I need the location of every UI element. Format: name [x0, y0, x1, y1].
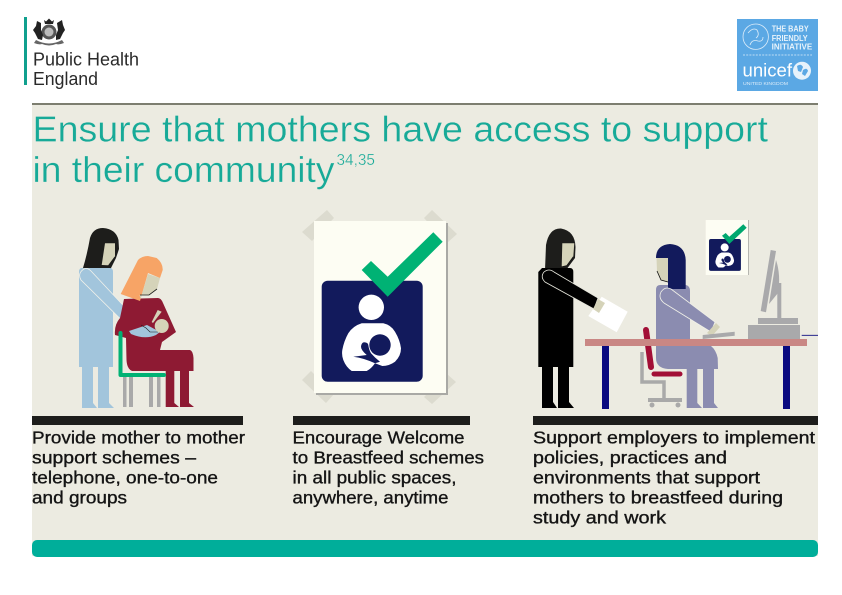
text: united kingdom: UNITED KINGDOM	[743, 81, 788, 87]
text: organisation name: Public Health	[33, 48, 139, 70]
text: support employers: environments that support	[533, 467, 760, 487]
panel background	[32, 104, 818, 556]
standing visitor	[538, 228, 628, 408]
text: initiative name: THE BABY	[772, 25, 809, 34]
text: initiative name: FRIENDLY	[772, 34, 808, 43]
illustration: welcome poster with check mark	[302, 210, 457, 404]
baby	[129, 325, 160, 337]
title: 34,35	[336, 152, 375, 169]
icon: baby friendly globe	[743, 24, 768, 49]
text: welcome to breastfeed: to Breastfeed schemes	[292, 447, 484, 467]
text: mother to mother support: Provide mother to mother	[32, 427, 245, 447]
computer	[703, 250, 818, 339]
icon: royal crest	[33, 18, 65, 46]
seated mother	[115, 256, 194, 407]
text: support employers: mothers to breastfeed during	[533, 487, 783, 507]
title: Ensure that mothers have access to support	[32, 108, 768, 150]
text: initiative name: INITIATIVE	[772, 42, 813, 52]
text: mother to mother support: and groups	[32, 487, 127, 507]
logo: Baby Friendly Initiative / unicef	[737, 19, 818, 91]
document	[588, 297, 628, 332]
desk	[585, 339, 807, 409]
icon: unicef emblem	[793, 62, 811, 80]
office chair	[642, 330, 682, 408]
illustration: workplace desk scene	[538, 220, 818, 409]
text: support employers: Support employers to implement	[533, 427, 815, 447]
column 1: caption	[32, 416, 245, 507]
icon: small breastfeeding sign	[709, 239, 741, 271]
chair	[120, 333, 164, 407]
icon: green check	[362, 232, 443, 297]
text: support employers: policies, practices and	[533, 447, 727, 467]
small welcome poster on wall	[706, 220, 749, 275]
icon: small check	[722, 224, 747, 244]
title: in their community	[32, 149, 335, 190]
text: unicef: unicef	[742, 60, 793, 80]
text: welcome to breastfeed: in all public spaces,	[292, 467, 456, 487]
seated worker	[656, 244, 720, 408]
text: welcome to breastfeed: anywhere, anytime	[292, 487, 448, 507]
text: organisation name: England	[33, 68, 98, 89]
logo: Public Health England	[24, 17, 139, 89]
text: support employers: study and work	[533, 507, 666, 527]
column 2: caption	[292, 416, 484, 507]
header rule	[32, 103, 818, 105]
text: mother to mother support: telephone, one-to-one	[32, 467, 218, 487]
poster sheet	[316, 223, 448, 395]
column 3: caption	[533, 416, 818, 527]
icon: breastfeeding sign	[322, 281, 423, 382]
footer bar	[32, 540, 818, 557]
illustration: two women, mother to mother support	[79, 228, 194, 408]
text: welcome to breastfeed: Encourage Welcome	[292, 427, 464, 447]
standing supporter	[79, 228, 132, 408]
tape corners	[302, 210, 457, 404]
text: mother to mother support: support schemes –	[32, 447, 196, 467]
